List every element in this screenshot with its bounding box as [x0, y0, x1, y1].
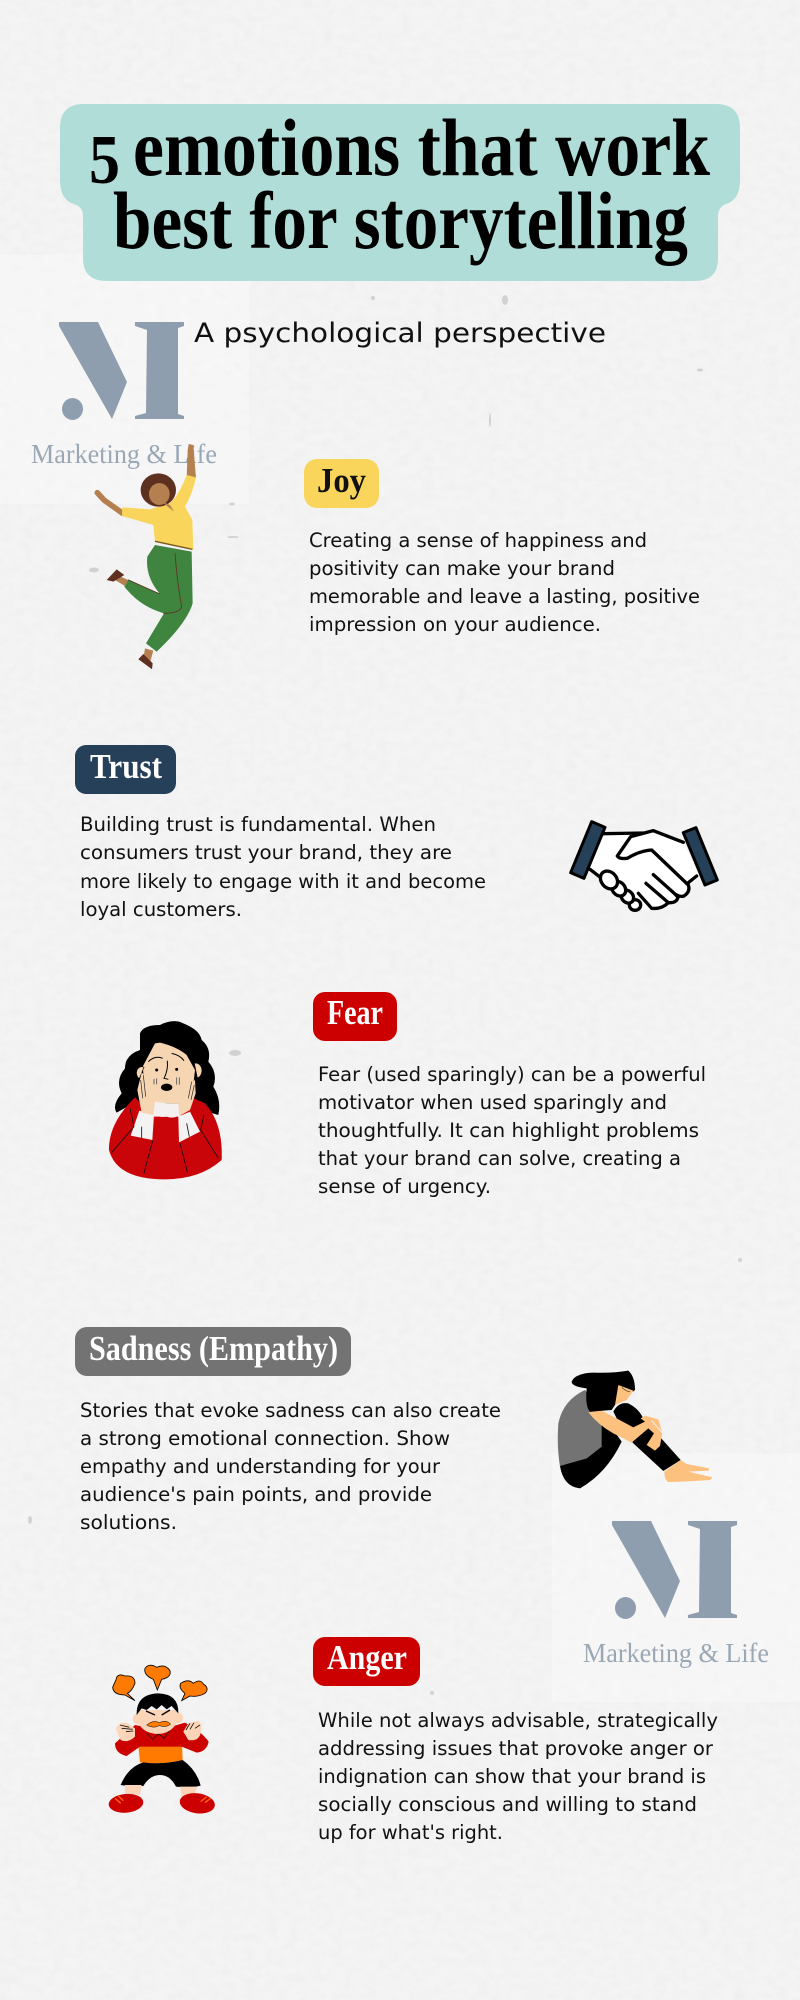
text: Sadness description: Stories that evoke sadness can also create: [80, 1399, 501, 1422]
subtitle: A psychological perspective: [194, 318, 606, 349]
text: Trust description: loyal customers.: [80, 898, 242, 921]
text: Anger description: up for what's right.: [318, 1821, 503, 1844]
badge: Fear: [313, 992, 397, 1041]
text: Sadness description: [80, 1399, 501, 1534]
text: Joy description: [309, 529, 700, 636]
text: Anger description: socially conscious and willing to stand: [318, 1793, 697, 1816]
badge: Trust: Trust: [90, 747, 162, 786]
text: Anger description: [318, 1709, 718, 1844]
badge: Sadness (Empathy): Sadness (Empathy): [89, 1329, 338, 1368]
text: Sadness description: audience's pain points, and provide: [80, 1483, 432, 1506]
badge: Trust: [75, 745, 176, 794]
text: Sadness description: solutions.: [80, 1511, 177, 1534]
illustration: fearful woman: [109, 1021, 222, 1179]
title banner: [60, 102, 740, 281]
icon: handshake: [571, 822, 717, 910]
text: Fear description: thoughtfully. It can highlight problems: [318, 1119, 699, 1142]
text: Sadness description: empathy and understanding for your: [80, 1455, 440, 1478]
illustration: angry boy: [108, 1665, 216, 1816]
text: Trust description: consumers trust your brand, they are: [80, 841, 452, 864]
watermark logo: top: [31, 322, 217, 469]
title banner: 5: [89, 122, 120, 199]
title banner: emotions that work: [133, 102, 710, 193]
watermark logo: bottom: Marketing & Life: [583, 1638, 769, 1668]
text: Trust description: Building trust is fundamental. When: [80, 813, 436, 836]
text: Joy description: positivity can make your brand: [309, 557, 615, 580]
watermark logo: bottom: [583, 1521, 769, 1668]
watermark logo: top: Marketing & Life: [31, 439, 217, 469]
text: Trust description: [80, 813, 486, 921]
badge: Joy: [304, 459, 379, 508]
illustration: joyful woman jumping: [97, 444, 196, 669]
text: Joy description: memorable and leave a lasting, positive: [309, 585, 700, 608]
text: Fear description: Fear (used sparingly) can be a powerful: [318, 1063, 706, 1086]
badge: Anger: Anger: [327, 1638, 407, 1677]
text: Anger description: indignation can show that your brand is: [318, 1765, 706, 1788]
text: Anger description: addressing issues that provoke anger or: [318, 1737, 713, 1760]
badge: Fear: Fear: [327, 993, 383, 1032]
text: Fear description: motivator when used sparingly and: [318, 1091, 667, 1114]
badge: Joy: Joy: [317, 461, 366, 500]
text: Fear description: [318, 1063, 706, 1198]
badge: Anger: [313, 1637, 420, 1686]
illustration: sad person hugging knees: [558, 1371, 713, 1488]
text: Anger description: While not always advisable, strategically: [318, 1709, 718, 1732]
text: Fear description: sense of urgency.: [318, 1175, 491, 1198]
text: Fear description: that your brand can solve, creating a: [318, 1147, 681, 1170]
text: Joy description: impression on your audience.: [309, 613, 601, 636]
text: Joy description: Creating a sense of happiness and: [309, 529, 647, 552]
text: Trust description: more likely to engage with it and become: [80, 870, 486, 893]
text: Sadness description: a strong emotional connection. Show: [80, 1427, 450, 1450]
title banner: best for storytelling: [113, 175, 688, 266]
